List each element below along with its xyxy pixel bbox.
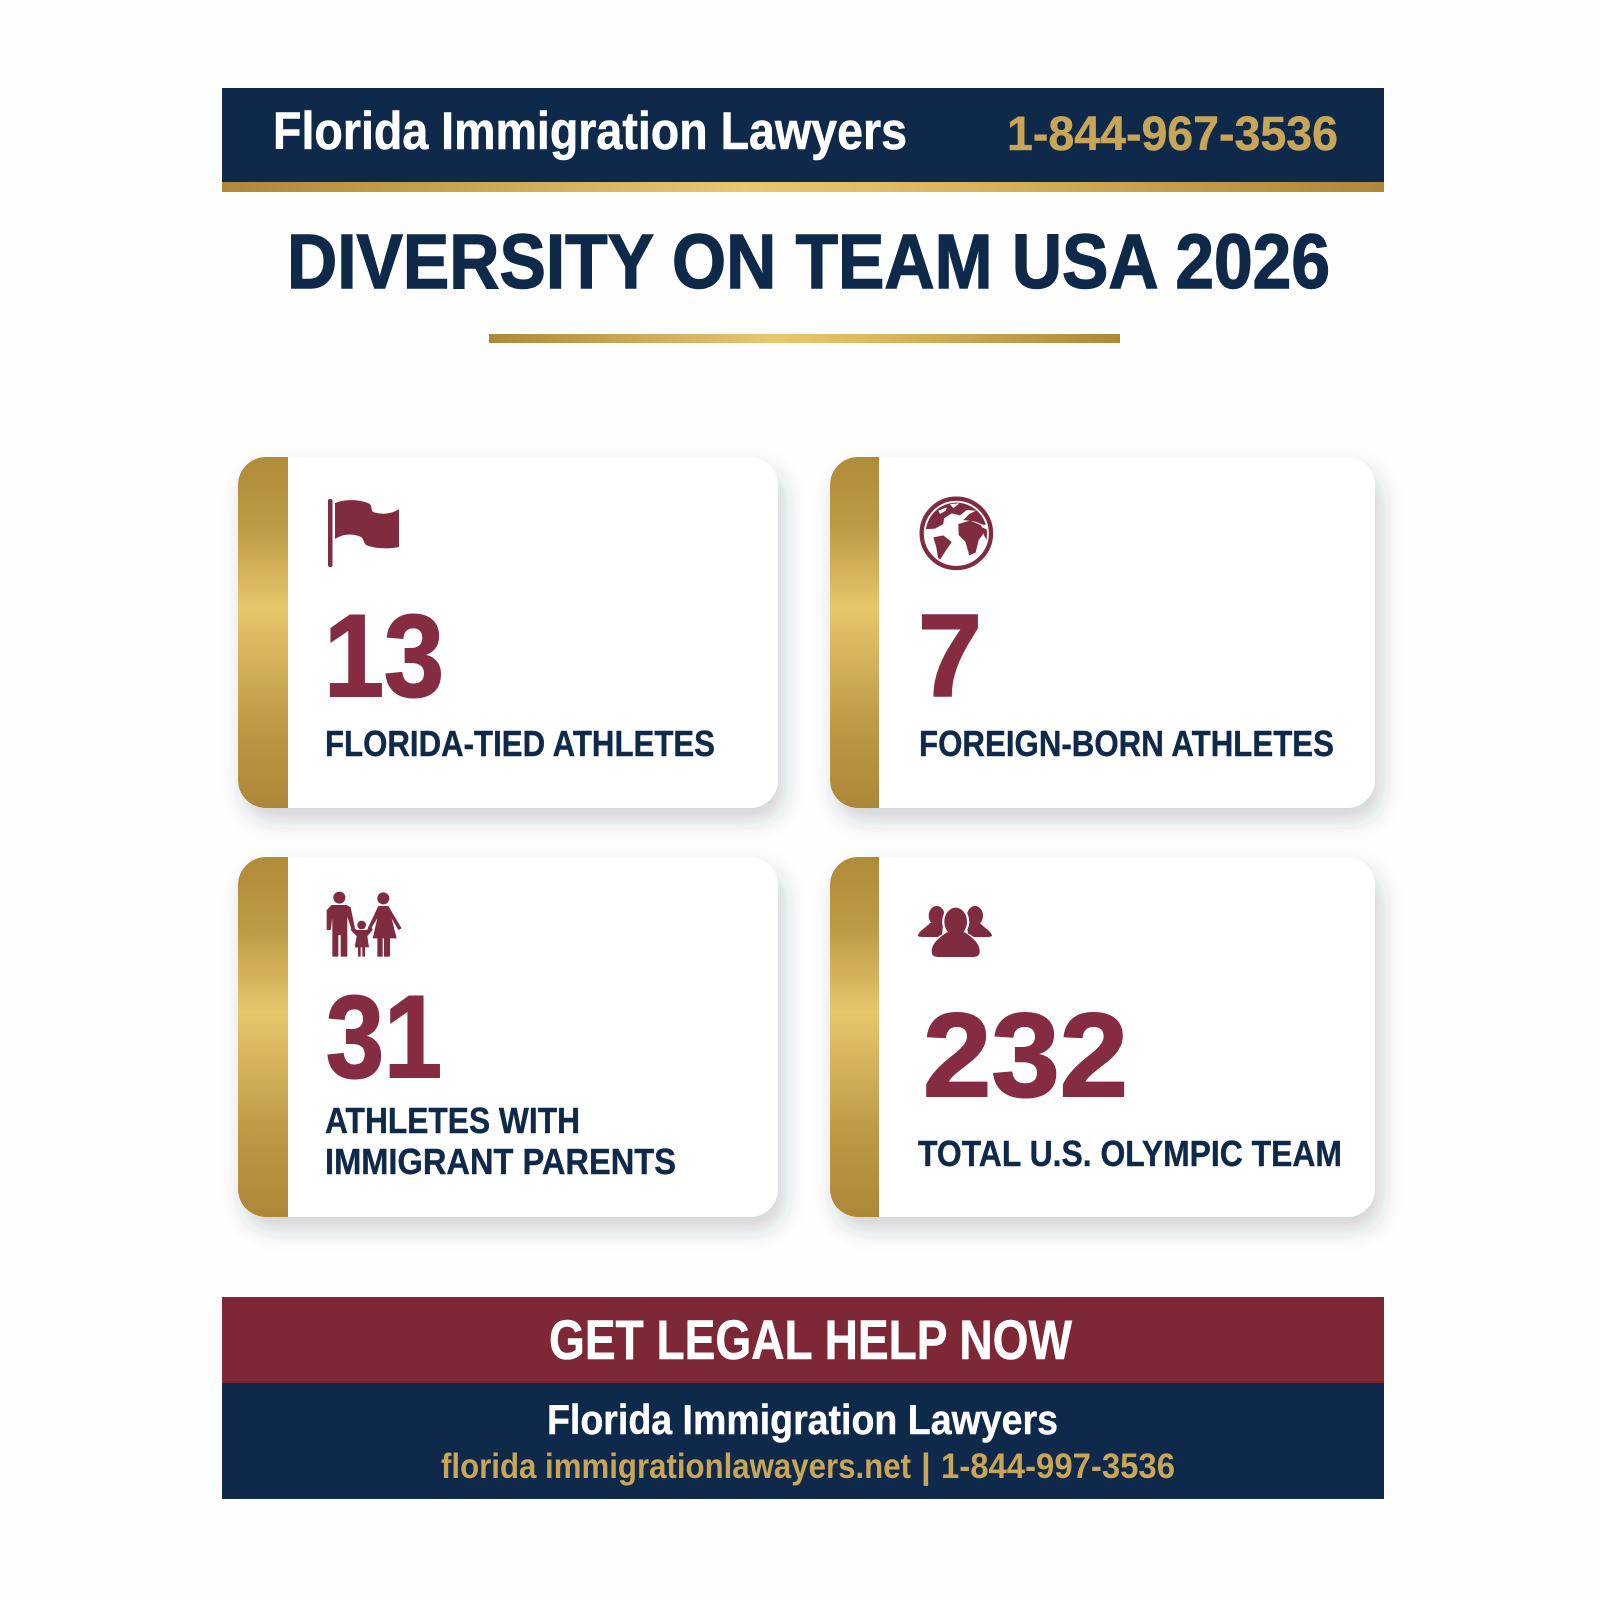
footer website and phone: 1-844-997-3536: [941, 1447, 1175, 1486]
call to action text: GET LEGAL HELP NOW: [549, 1308, 1072, 1371]
icon: globe: [922, 499, 991, 568]
panel: athletes with immigrant parents: [238, 857, 778, 1217]
header firm name: Florida Immigration Lawyers: [273, 102, 907, 161]
header banner: [222, 88, 1384, 192]
label: Florida-tied athletes: FLORIDA-TIED ATHLETES: [325, 723, 715, 764]
title: DIVERSITY ON TEAM USA 2026: [287, 219, 1330, 305]
panel: total U.S. Olympic team: [830, 857, 1375, 1217]
panel: Florida-tied athletes: [238, 457, 778, 808]
header phone number: 1-844-967-3536: [1007, 108, 1338, 161]
label: athletes with immigrant parents: ATHLETES WITH: [325, 1100, 580, 1141]
call to action banner: [222, 1297, 1384, 1383]
label: athletes with immigrant parents: IMMIGRANT PARENTS: [325, 1141, 676, 1182]
footer website and phone: |: [921, 1447, 931, 1486]
footer firm name: Florida Immigration Lawyers: [547, 1396, 1058, 1443]
label: total U.S. Olympic team: TOTAL U.S. OLYMPIC TEAM: [918, 1133, 1342, 1174]
stat: 232: 232: [923, 989, 1128, 1122]
icon: family: [327, 892, 402, 957]
panel: foreign-born athletes: [830, 457, 1375, 808]
icon: flag: [328, 499, 399, 567]
label: foreign-born athletes: FOREIGN-BORN ATHLETES: [919, 723, 1334, 764]
stat: 31: 31: [326, 971, 442, 1102]
footer contact panel: [222, 1383, 1384, 1499]
icon: group of people: [918, 906, 992, 957]
label: athletes with immigrant parents: [325, 1100, 676, 1182]
footer website and phone: florida immigrationlawayers.net: [441, 1447, 911, 1486]
title gold rule: [489, 334, 1120, 343]
stat: 7: 7: [918, 590, 982, 721]
stat: 13: 13: [324, 590, 444, 721]
